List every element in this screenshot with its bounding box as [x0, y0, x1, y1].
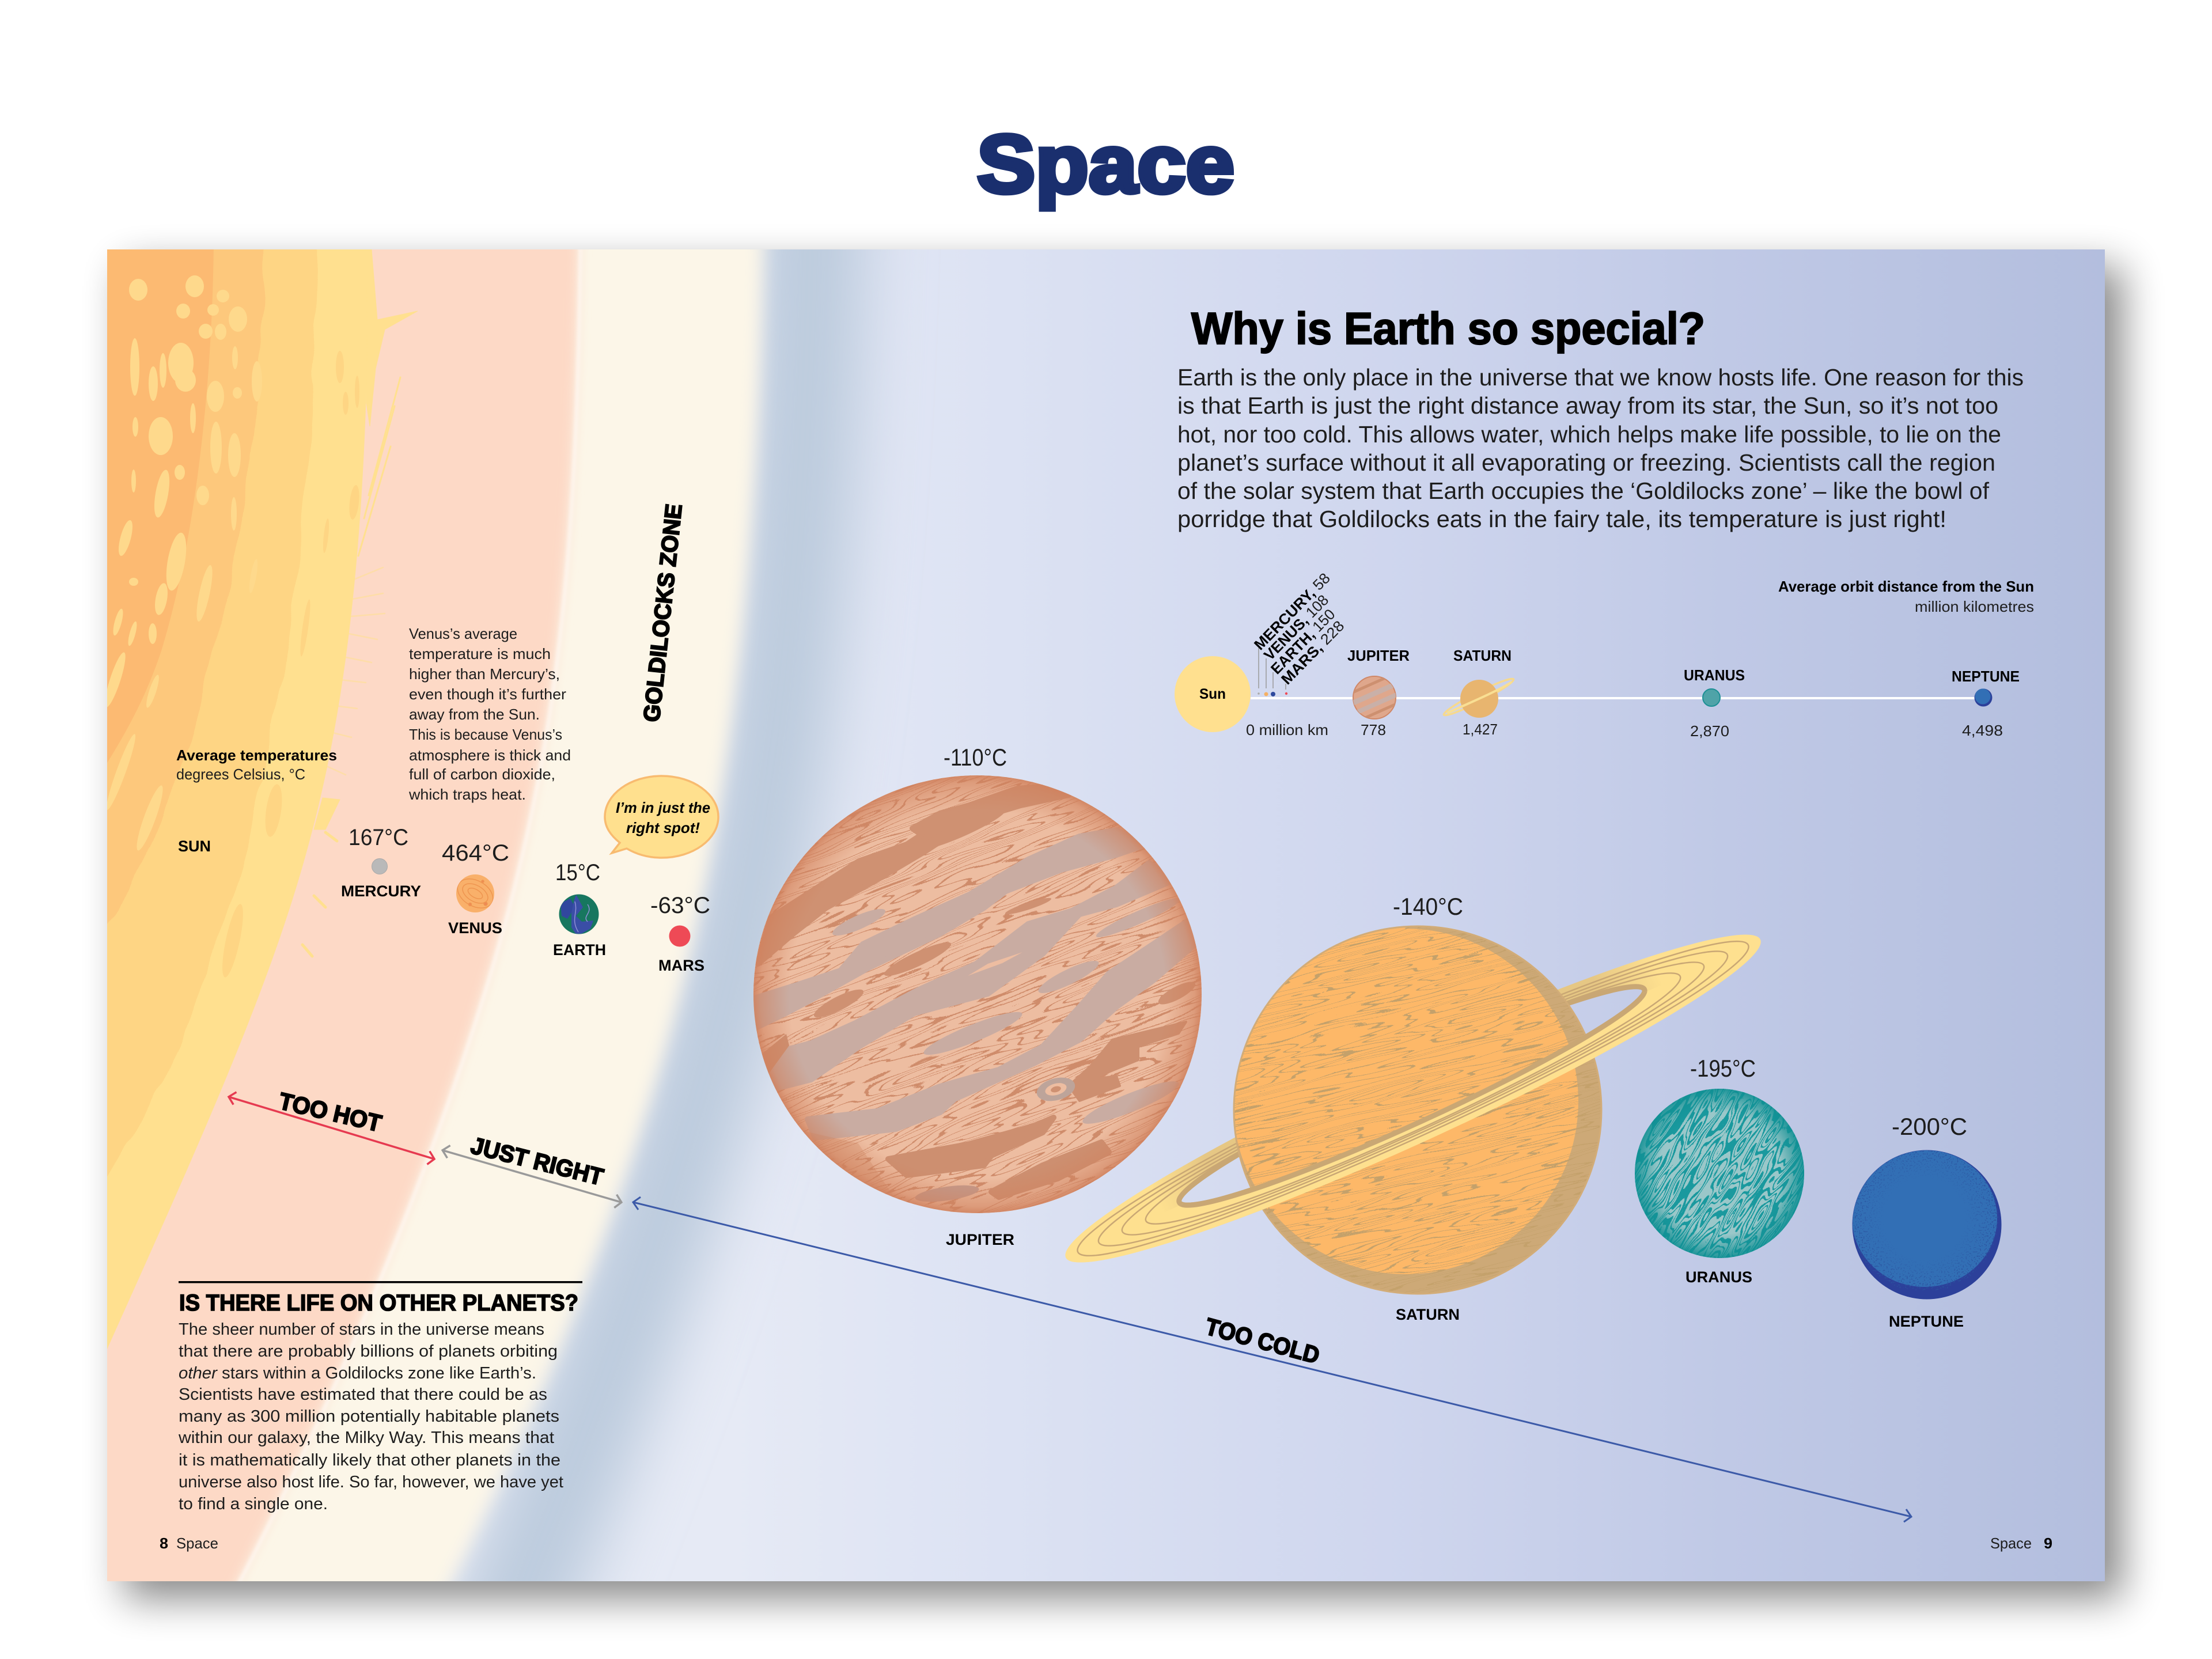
orbit: inner planet labels: VENUS, 108: [1260, 591, 1332, 664]
text block: intro: porridge that Goldilocks eats in the fairy tale, its temperature is just right!: [1177, 506, 1946, 532]
orbit: Neptune: [1952, 668, 2020, 739]
text block: life panel body: to find a single one.: [179, 1495, 328, 1513]
orbit: Jupiter: 778: [1361, 721, 1386, 738]
panel: spread background: [107, 249, 2105, 1581]
planet group: Mercury: MERCURY: [341, 882, 421, 900]
temperature: Jupiter: -110°C: [944, 744, 1007, 771]
page shadow: [124, 267, 2122, 1599]
orbit: Uranus: URANUS: [1684, 666, 1745, 684]
orbit: inner planet labels: [1251, 569, 1348, 688]
arrow: too hot: [225, 1088, 438, 1165]
callout: speech bubble: right spot!: [626, 819, 700, 836]
arrow: too hot: TOO HOT: [276, 1088, 384, 1137]
planet body: Saturn: [1234, 926, 1601, 1294]
orbit: Saturn: [1442, 647, 1516, 738]
chart title: million kilometres: [1915, 598, 2034, 615]
planet group: Jupiter: [609, 631, 1349, 1355]
text block: life panel body: many as 300 million potentially habitable planets: [179, 1407, 559, 1426]
callout: average temperatures key: [176, 747, 337, 783]
arrow: just right: JUST RIGHT: [468, 1132, 606, 1191]
orbit: Sun: [1175, 656, 1251, 732]
sun: spots: [101, 275, 262, 853]
text block: life panel body: that there are probably billions of planets orbiting: [179, 1342, 558, 1361]
label: Neptune: NEPTUNE: [1889, 1313, 1964, 1330]
heading: life panel: IS THERE LIFE ON OTHER PLANETS?: [179, 1290, 578, 1316]
orbit: Uranus: [1684, 666, 1745, 740]
orbit: Jupiter: [1344, 647, 1410, 738]
planet group: Venus: [442, 840, 509, 937]
text block: Venus note: away from the Sun.: [409, 706, 540, 723]
text block: Venus note: full of carbon dioxide,: [409, 766, 555, 783]
text block: life panel body: universe also host life. So far, however, we have yet: [179, 1473, 563, 1491]
temperature: Neptune: -200°C: [1892, 1113, 1967, 1140]
text block: Venus note: Venus’s average: [409, 625, 517, 642]
panel: is there life on other planets: [178, 1281, 582, 1513]
chart title: [1778, 578, 2034, 615]
chart title: Average orbit distance from the Sun: [1778, 578, 2034, 595]
sun: edge flares: [302, 249, 418, 956]
sun: layered surface: [107, 249, 418, 1349]
title: Space: [977, 119, 1234, 210]
arrow: too cold: [633, 1197, 1911, 1522]
text block: life panel body: within our galaxy, the Milky Way. This means that: [178, 1429, 554, 1447]
planet group: Earth: [553, 860, 606, 959]
label: Jupiter: JUPITER: [946, 1231, 1014, 1248]
orbit: Neptune: 4,498: [1962, 722, 2003, 739]
label: Sun: SUN: [178, 838, 211, 855]
planet group: Mercury: 167°C: [349, 825, 408, 850]
orbit: Neptune: NEPTUNE: [1952, 668, 2020, 685]
text block: life panel body: The sheer number of stars in the universe means: [179, 1320, 544, 1339]
text block: Venus note: atmosphere is thick and: [409, 747, 571, 764]
planet group: Mercury: [341, 825, 421, 900]
temperature: Saturn: -140°C: [1393, 893, 1463, 920]
orbit: inner planet labels: MERCURY, 58: [1251, 569, 1334, 653]
text block: intro: Earth is the only place in the universe that we know hosts life. One reason for this: [1177, 364, 2024, 391]
planet group: Venus: VENUS: [448, 919, 502, 937]
planet group: Saturn: [1048, 845, 1778, 1377]
planet group: Venus: 464°C: [442, 840, 509, 866]
orbit: inner planet leaders and dots: [1257, 648, 1287, 696]
orbit: Saturn: SATURN: [1453, 647, 1512, 664]
text block: Venus note: [408, 625, 571, 803]
footer: right folio: Space: [1990, 1535, 2032, 1552]
arrow: just right: [440, 1132, 624, 1208]
planet group: Mars: -63°C: [650, 893, 710, 918]
orbit: inner planet labels: MARS, 228: [1278, 617, 1348, 688]
orbit: Saturn: 1,427: [1463, 721, 1498, 738]
text block: intro: of the solar system that Earth occupies the ‘Goldilocks zone’ – like the bowl of: [1177, 478, 1990, 504]
text block: life panel body: it is mathematically likely that other planets in the: [179, 1451, 560, 1469]
text block: Venus note: even though it’s further: [409, 685, 566, 703]
ring: back half: [1048, 900, 1778, 1297]
text block: intro: [1177, 364, 2024, 532]
text block: Venus note: higher than Mercury’s,: [409, 665, 560, 683]
footer: right folio: 9: [2044, 1535, 2052, 1552]
orbit: Uranus: 2,870: [1690, 722, 1729, 740]
callout: speech bubble: I’m in just the: [616, 799, 710, 816]
text block: intro: is that Earth is just the right distance away from its star, the Sun, so it’s not too: [1177, 392, 1998, 419]
temperature: Uranus: -195°C: [1690, 1055, 1756, 1082]
label: Uranus: URANUS: [1685, 1268, 1752, 1286]
callout: average temperatures key: Average temperatures: [176, 747, 337, 764]
planet group: Earth: EARTH: [553, 941, 606, 959]
callout: average temperatures key: degrees Celsius, °C: [176, 766, 305, 783]
footer: right folio: [1990, 1535, 2052, 1552]
planet group: Mars: MARS: [658, 957, 704, 974]
ring: front half: [1048, 900, 1778, 1297]
text block: life panel body: other stars within a Goldilocks zone like Earth’s.: [179, 1364, 536, 1382]
orbit: Jupiter: JUPITER: [1347, 647, 1410, 664]
label: Saturn: SATURN: [1396, 1306, 1460, 1323]
orbit: 0 label: 0 million km: [1246, 721, 1328, 738]
text block: life panel body: [178, 1320, 563, 1513]
planet group: Uranus: [1564, 1018, 1875, 1329]
text block: Venus note: temperature is much: [409, 645, 551, 662]
text block: intro: hot, nor too cold. This allows water, which helps make life possible, to lie on the: [1177, 421, 2001, 448]
chart: orbit distance: [1175, 569, 2034, 740]
text block: life panel body: Scientists have estimated that there could be as: [179, 1385, 547, 1404]
footer: left folio: Space: [176, 1535, 218, 1552]
callout: speech bubble: [605, 776, 718, 858]
arrow: too cold: TOO COLD: [1203, 1313, 1323, 1369]
orbit: inner planet labels: EARTH, 150: [1267, 605, 1339, 677]
heading: Goldilocks zone: GOLDILOCKS ZONE: [639, 503, 687, 723]
text block: Venus note: This is because Venus’s: [409, 726, 562, 743]
footer: left folio: 8: [160, 1535, 168, 1552]
planet group: Earth: 15°C: [555, 860, 600, 885]
planet group: Neptune: [1849, 1113, 2005, 1330]
text block: Venus note: which traps heat.: [408, 786, 526, 803]
text block: intro: planet’s surface without it all evaporating or freezing. Scientists call the region: [1177, 449, 1995, 476]
heading: why is Earth so special: Why is Earth so special?: [1191, 303, 1705, 354]
planet group: Mars: [650, 893, 710, 974]
orbit: Sun: Sun: [1199, 686, 1226, 702]
